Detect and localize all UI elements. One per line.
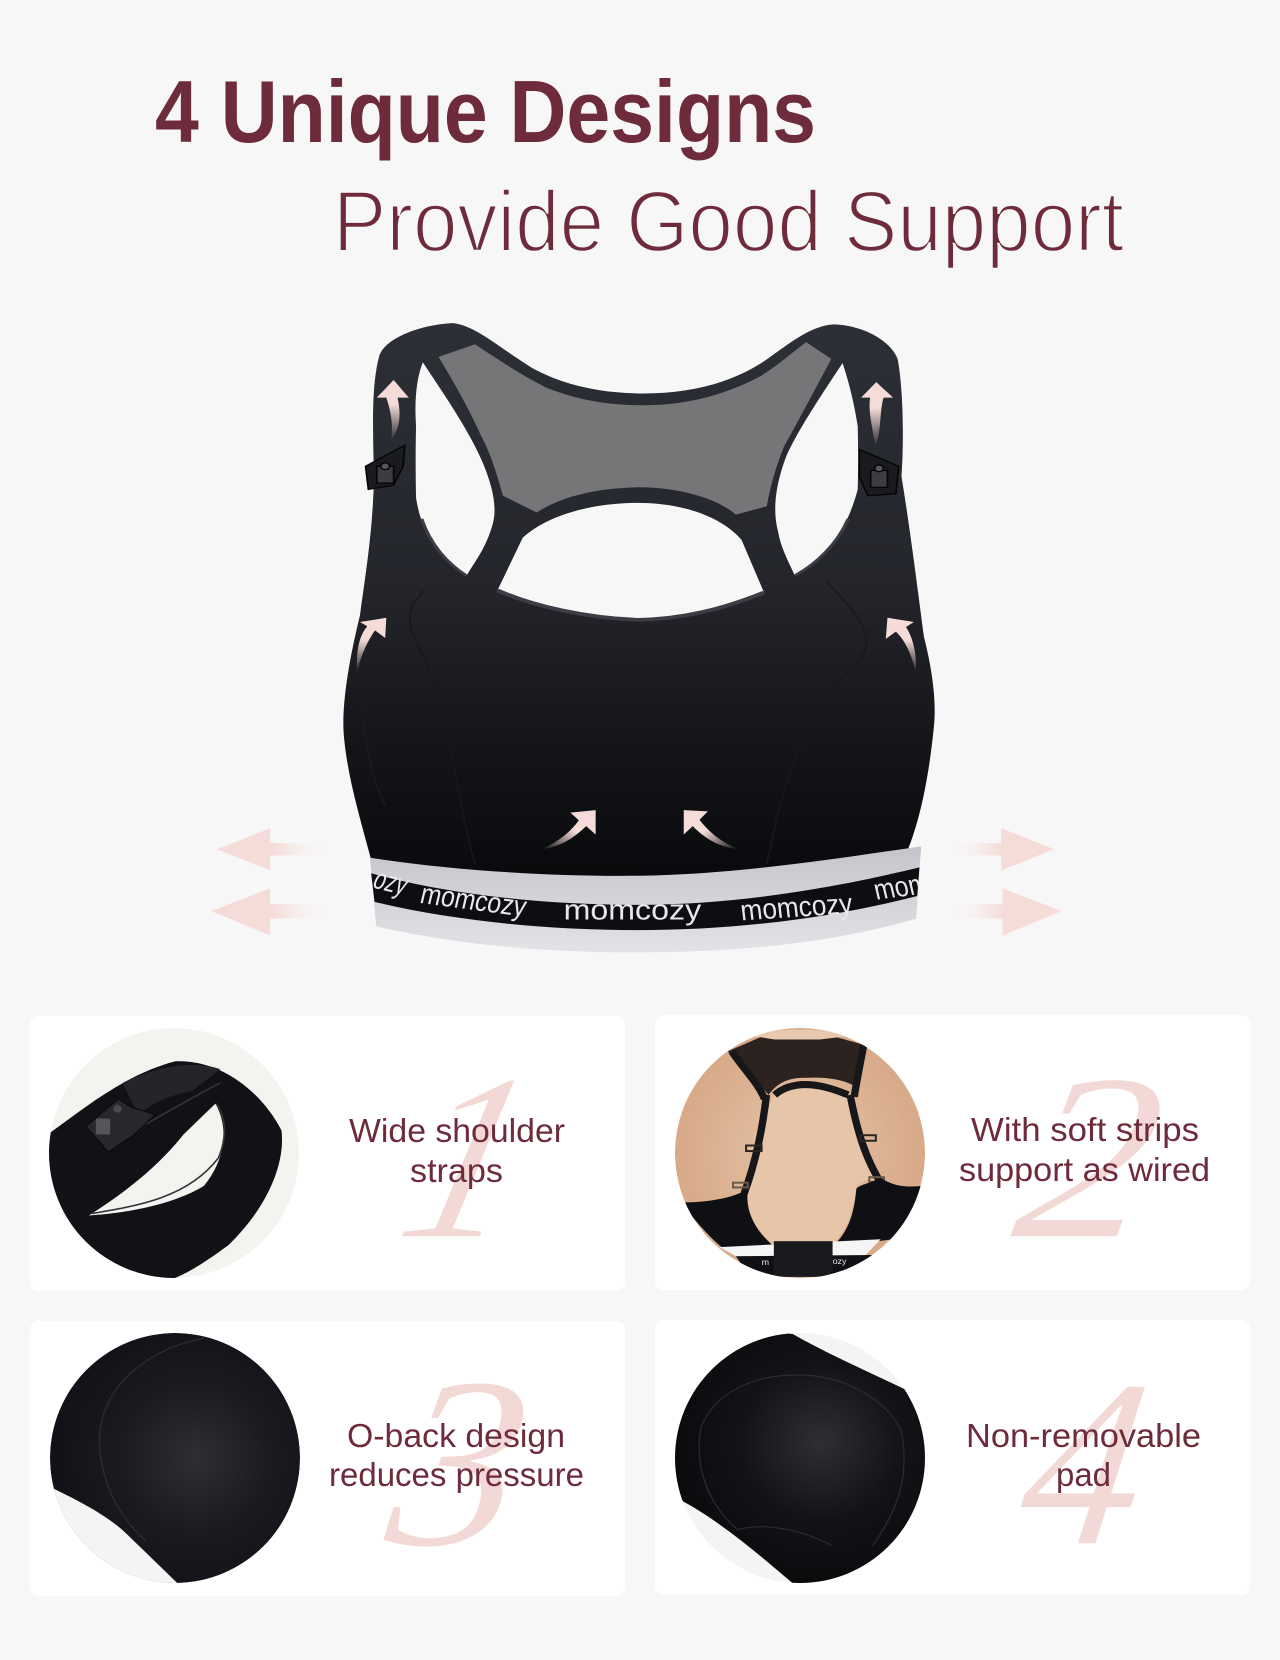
- card: [655, 1015, 1250, 1290]
- arrow: side up right: [886, 618, 916, 672]
- panel 2: soft strips: [675, 1028, 1208, 1278]
- arrow: stretch upper left: [217, 828, 332, 870]
- mesh back panel: [439, 342, 831, 515]
- caption: O-back design: [347, 1417, 565, 1454]
- band logo strip: [371, 867, 919, 930]
- caption: support as wired: [959, 1151, 1210, 1188]
- photo: fabric close-up: [41, 1333, 300, 1589]
- band logo text: momcozy: [870, 861, 983, 906]
- caption: pad: [1056, 1456, 1111, 1493]
- numeral 1: 1: [380, 1026, 558, 1289]
- band silver: [370, 846, 921, 952]
- numeral 2: 2: [1000, 1025, 1181, 1289]
- arrow: stretch lower right: [946, 888, 1061, 936]
- arrow: strap up right: [861, 382, 893, 446]
- photo: strap loop: [41, 1028, 299, 1285]
- caption: [966, 1417, 1201, 1493]
- caption: Non-removable: [966, 1417, 1201, 1454]
- arrow: strap up left: [377, 380, 409, 441]
- photo: back view: ozy: [833, 1256, 847, 1266]
- arrow: inward right: [684, 810, 739, 849]
- caption: [329, 1417, 584, 1493]
- caption: Wide shoulder: [349, 1112, 565, 1149]
- card: [655, 1320, 1250, 1595]
- bra body: [343, 323, 935, 889]
- card: [30, 1016, 625, 1291]
- heading line 2: Provide Good Support: [333, 174, 1124, 270]
- arrow: stretch lower left: [211, 888, 335, 936]
- product: sports bra with arrows: [211, 323, 1061, 952]
- arrow: stretch upper right: [946, 828, 1054, 870]
- card: [30, 1321, 625, 1596]
- panel 1: wide shoulder straps: [49, 1061, 564, 1278]
- band logo text: momcozy: [739, 888, 854, 927]
- strap clip right: [859, 449, 899, 496]
- neckline seams: [352, 519, 866, 864]
- caption: [349, 1112, 565, 1189]
- heading line 1: 4 Unique Designs: [155, 62, 816, 161]
- strap clip left: [366, 445, 405, 489]
- numeral 3: 3: [372, 1328, 548, 1599]
- band logo text: momcozy: [564, 894, 701, 926]
- caption: reduces pressure: [329, 1456, 584, 1493]
- panel 3: O-back design: [50, 1333, 582, 1583]
- band logo text: [374, 874, 920, 926]
- caption: [959, 1111, 1210, 1188]
- photo: pad close-up: [675, 1333, 925, 1583]
- photo: back view: [675, 1028, 925, 1278]
- arrow: side up left: [357, 618, 386, 672]
- band logo text: ozy: [368, 863, 414, 901]
- band logo text: momcozy: [417, 878, 530, 923]
- arrow: inward left: [541, 810, 596, 849]
- under band: [370, 846, 922, 952]
- numeral 4: 4: [1007, 1331, 1164, 1597]
- photo: back view: m: [762, 1257, 769, 1267]
- caption: With soft strips: [971, 1111, 1199, 1148]
- title: [155, 62, 1124, 270]
- caption: straps: [410, 1152, 503, 1189]
- panel 4: non-removable pad: [675, 1334, 1200, 1583]
